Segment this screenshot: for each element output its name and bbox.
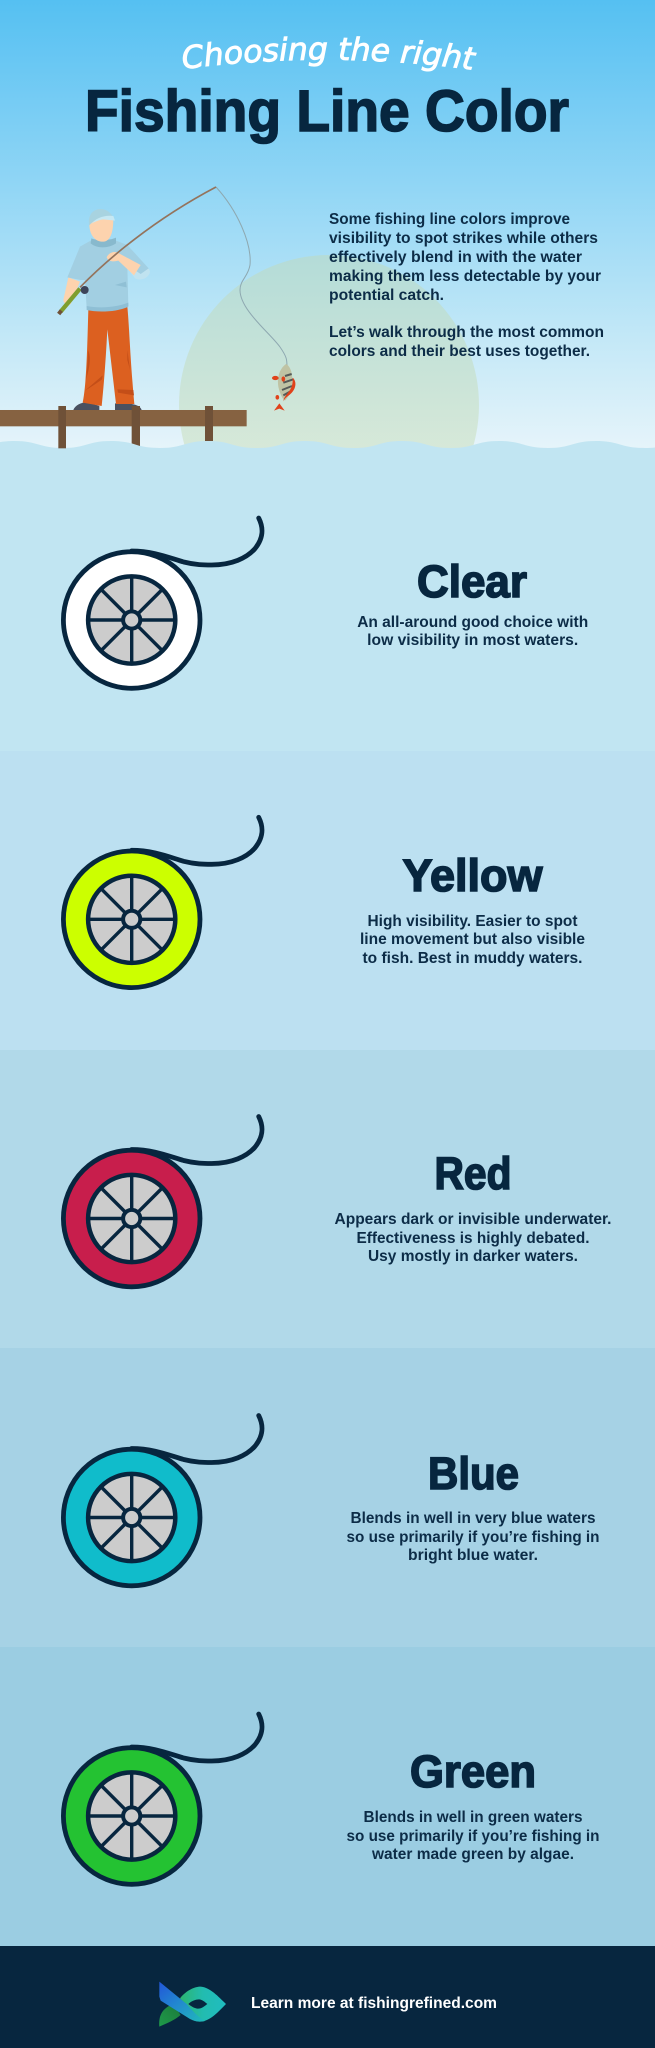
title: main heading: Fishing Line Color [85, 79, 569, 144]
panel: blue [0, 1348, 655, 1647]
heading: green: Green [410, 1746, 536, 1797]
pier posts [58, 406, 213, 448]
description: clear [357, 614, 588, 649]
background sun [179, 255, 479, 555]
band: green [0, 1647, 655, 1947]
heading: clear: Clear [417, 556, 527, 607]
intro text: effectively blend in with the water [329, 249, 582, 266]
sweater [67, 241, 149, 312]
intro text: potential catch. [329, 287, 444, 304]
description: clear: low visibility in most waters. [367, 632, 578, 649]
forearm and hand [107, 252, 141, 275]
header sky background [0, 0, 655, 450]
rod butt [59, 311, 61, 314]
hooked fish [272, 364, 295, 411]
intro text: visibility to spot strikes while others [329, 230, 598, 247]
trousers [83, 307, 134, 406]
description: clear: An all-around good choice with [357, 614, 588, 631]
description: blue [346, 1510, 600, 1564]
heading: red: Red [434, 1148, 512, 1199]
panel: green [0, 1647, 655, 1947]
heading: blue: Blue [428, 1448, 519, 1499]
description: red [334, 1211, 612, 1265]
fishing rod [80, 187, 216, 287]
head and cap [89, 209, 115, 242]
reel on rod [81, 286, 89, 294]
reel: red [63, 1116, 262, 1287]
reel: clear [63, 518, 262, 688]
description: green: so use primarily if you’re fishing in [346, 1828, 600, 1845]
intro text: making them less detectable by your [329, 268, 601, 285]
description: yellow: High visibility. Easier to spot [368, 913, 578, 930]
footer text: Learn more at fishingrefined.com [251, 1995, 497, 2012]
description: blue: bright blue water. [408, 1547, 538, 1564]
band: red [0, 1050, 655, 1348]
description: blue: so use primarily if you’re fishing in [346, 1529, 600, 1546]
upper body and rod [59, 187, 216, 314]
reel: green [63, 1714, 262, 1884]
description: red: Effectiveness is highly debated. [356, 1230, 590, 1247]
logo: fish [159, 1982, 226, 2027]
description: yellow [360, 913, 585, 967]
band: yellow [0, 751, 655, 1050]
description: blue: Blends in well in very blue waters [350, 1510, 596, 1527]
faded sleeve [130, 262, 150, 279]
band: blue [0, 1348, 655, 1647]
description: yellow: to fish. Best in muddy waters. [362, 950, 582, 967]
intro text [329, 211, 604, 360]
water band and waves [0, 441, 655, 751]
panel: red [0, 1050, 655, 1348]
description: red: Appears dark or invisible underwater. [334, 1211, 612, 1228]
footer [0, 1946, 655, 2048]
intro text: Let’s walk through the most common [329, 324, 604, 341]
description: green: water made green by algae. [371, 1846, 574, 1863]
left arm [63, 277, 80, 305]
footer bar [0, 1946, 655, 2048]
heading: yellow: Yellow [402, 850, 543, 901]
panel: clear [0, 441, 655, 751]
pier planks [0, 410, 247, 426]
collar [91, 238, 116, 247]
illustration: fisherman on pier [0, 187, 287, 448]
description: green [346, 1809, 600, 1863]
reel: blue [63, 1416, 262, 1586]
description: red: Usy mostly in darker waters. [368, 1248, 578, 1265]
intro text: colors and their best uses together. [329, 343, 590, 360]
fishing line [216, 187, 287, 367]
title: script line: Choosing the right [182, 36, 477, 72]
panel: yellow [0, 751, 655, 1050]
description: yellow: line movement but also visible [360, 931, 585, 948]
description: green: Blends in well in green waters [364, 1809, 582, 1826]
legs and pier [0, 307, 247, 448]
rod handle [61, 289, 80, 312]
reel: yellow [63, 817, 262, 988]
intro text: Some fishing line colors improve [329, 211, 570, 228]
shoes [73, 402, 142, 410]
